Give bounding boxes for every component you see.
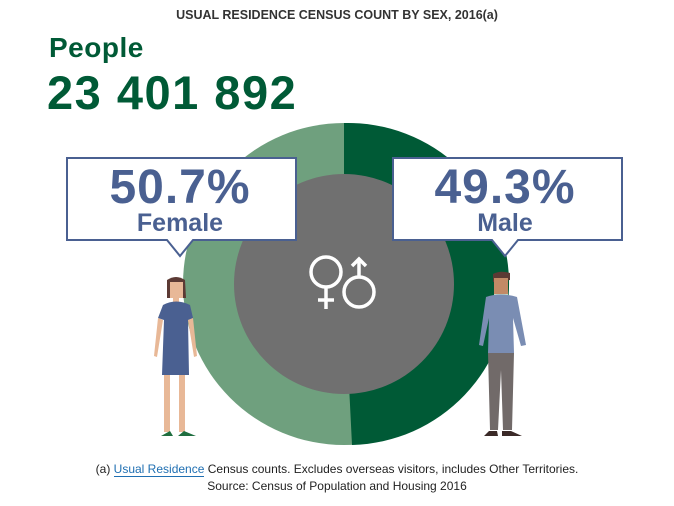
icon: man figure — [479, 272, 526, 436]
footnote — [96, 462, 578, 493]
callout: male — [393, 158, 622, 256]
heading: people label: People — [49, 32, 144, 63]
callout: male: Male — [477, 209, 533, 237]
footnote: Source: Census of Population and Housing 2016 — [207, 479, 467, 493]
title: USUAL RESIDENCE CENSUS COUNT BY SEX, 2016(a) — [176, 8, 498, 22]
callout: female: 50.7% — [109, 161, 251, 214]
icon: woman figure — [154, 277, 197, 436]
callout: male: 49.3% — [434, 161, 576, 214]
callout: female: Female — [137, 209, 223, 237]
heading: people count: 23 401 892 — [47, 66, 297, 119]
icon: gender symbols — [311, 257, 374, 309]
footnote: (a) Usual Residence Census counts. Excludes overseas visitors, includes Other Territories. — [96, 462, 578, 476]
callout: female — [67, 158, 296, 256]
